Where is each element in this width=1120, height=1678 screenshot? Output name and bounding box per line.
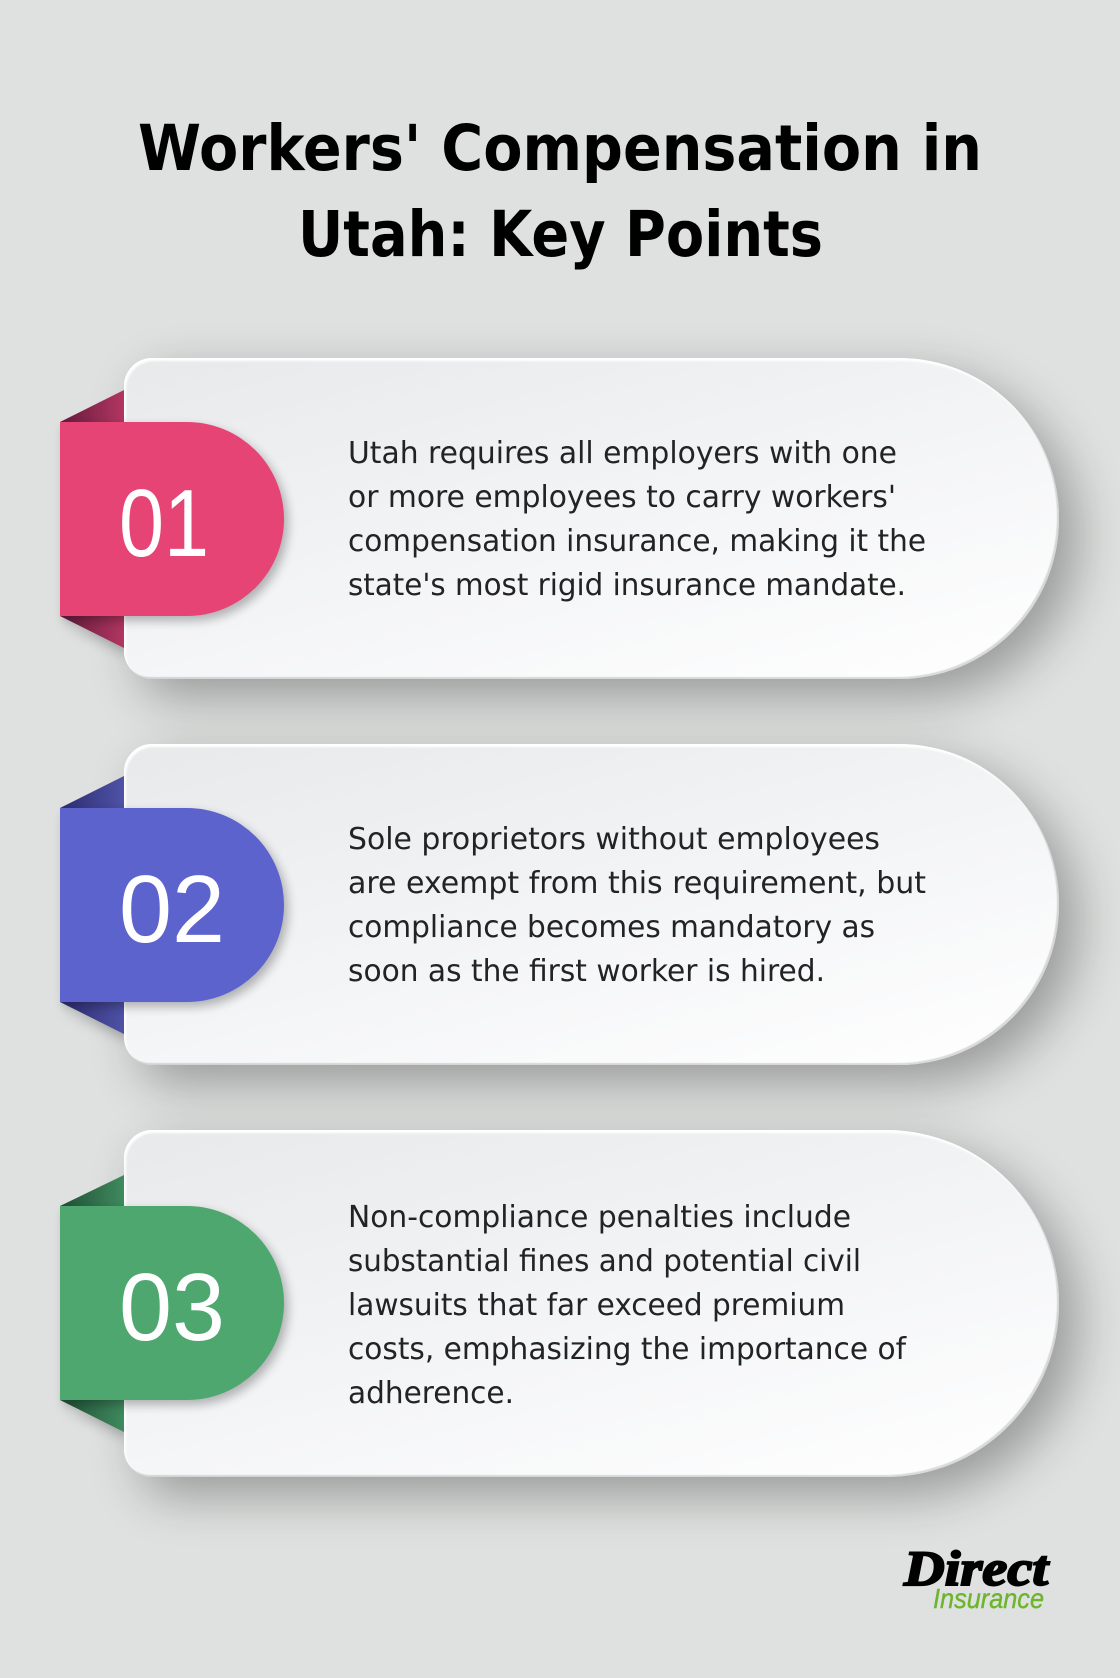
number 01: 01 [119, 470, 209, 577]
text block 02: compliance becomes mandatory as [348, 910, 875, 945]
text block 02: soon as the first worker is hired. [348, 954, 825, 989]
title: Utah: Key Points [298, 198, 823, 271]
text block 02: are exempt from this requirement, but [348, 866, 926, 901]
text block 03: substantial fines and potential civil [348, 1244, 861, 1279]
text block 03: adherence. [348, 1376, 514, 1411]
ribbon folds 02 [60, 776, 124, 1034]
number 02: 02 [119, 856, 225, 963]
logo: Direct Insurance: Direct [903, 1540, 1050, 1596]
ribbon folds 03 [60, 1175, 124, 1432]
number badge 03 [60, 1206, 284, 1400]
title [138, 112, 982, 271]
text block 01: Utah requires all employers with one [348, 436, 897, 471]
text block 02 [348, 822, 926, 989]
panel: step 01 [58, 348, 1104, 726]
text block 01: or more employees to carry workers' [348, 480, 896, 515]
logo: Direct Insurance [902, 1540, 1051, 1614]
title: Workers' Compensation in [138, 112, 982, 185]
number badge 02 [60, 808, 284, 1002]
text block 01: compensation insurance, making it the [348, 524, 926, 559]
card background 02 [124, 744, 1059, 1065]
panel: step 02 [58, 734, 1104, 1112]
text block 03: lawsuits that far exceed premium [348, 1288, 845, 1323]
text block 02: Sole proprietors without employees [348, 822, 880, 857]
ribbon folds 01 [60, 390, 124, 648]
logo: Direct Insurance: Insurance [933, 1583, 1044, 1614]
text block 01 [348, 436, 926, 603]
number 03: 03 [119, 1254, 225, 1361]
card background 01 [124, 358, 1059, 679]
card background 03 [124, 1130, 1059, 1477]
text block 03: costs, emphasizing the importance of [348, 1332, 907, 1367]
text block 01: state's most rigid insurance mandate. [348, 568, 906, 603]
text block 03 [348, 1200, 907, 1411]
panel: step 03 [58, 1120, 1104, 1524]
number badge 01 [60, 422, 284, 616]
text block 03: Non-compliance penalties include [348, 1200, 851, 1235]
